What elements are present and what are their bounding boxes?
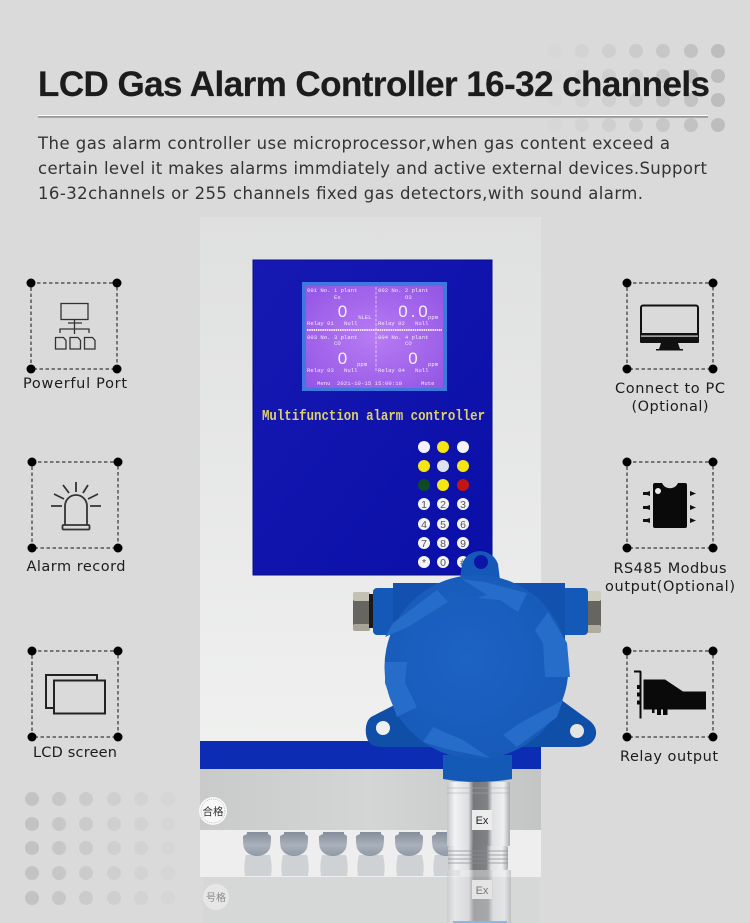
side pipes — [373, 588, 397, 635]
controller name: Multifunction alarm controller — [262, 409, 485, 425]
keypad: 8 — [440, 538, 446, 550]
lcd display: Null — [344, 320, 358, 327]
icon: desktop monitor — [640, 306, 699, 350]
feature: Alarm record: Alarm record — [26, 559, 126, 575]
cable glands — [243, 832, 461, 876]
description text: The gas alarm controller use microprocessor,when gas content exceed a — [37, 134, 670, 153]
nut: left — [353, 592, 374, 631]
mounting ears — [366, 699, 596, 747]
keypad: 9 — [460, 538, 466, 550]
icon: stacked screens — [46, 675, 105, 714]
sensor probe — [447, 782, 510, 870]
lcd display: 0 — [408, 349, 418, 368]
lcd display: Relay 04 — [378, 367, 405, 374]
dot pattern: top right — [548, 44, 725, 132]
lcd display: Ex — [334, 294, 341, 301]
lcd display: Mute — [421, 380, 434, 387]
gas detector — [353, 551, 601, 923]
feature: Connect to PC: (Optional) — [632, 399, 708, 415]
lower housing — [200, 769, 541, 830]
lcd display: %LEL — [358, 314, 371, 321]
nut: right — [587, 591, 601, 633]
feature: Connect to PC — [615, 278, 725, 415]
stamp: reflection: 号格 — [206, 891, 226, 904]
feature: Relay output — [620, 646, 718, 765]
lcd display: CO — [334, 340, 341, 347]
feature: RS485 Modbus: RS485 Modbus — [614, 561, 726, 577]
sensor probe: Ex — [476, 815, 489, 827]
round cover — [384, 575, 568, 759]
lcd display: 004 No. 4 plant — [378, 334, 428, 341]
icon: expansion card — [634, 670, 706, 718]
lcd display: 0 — [338, 349, 347, 368]
feature: Powerful Port — [23, 278, 127, 392]
lcd display: 0 — [398, 302, 408, 321]
feature: RS485 Modbus — [605, 458, 735, 595]
feature: Alarm record — [26, 458, 126, 575]
icon: chip — [643, 483, 696, 528]
keypad: 6 — [460, 519, 466, 531]
keypad: 2 — [440, 499, 446, 511]
body box — [393, 583, 565, 643]
feature: Connect to PC: Connect to PC — [615, 381, 725, 397]
lcd display: ppm — [428, 361, 439, 368]
cable gland strip — [200, 830, 541, 877]
feature: Powerful Port: Powerful Port — [23, 376, 127, 392]
icon: alarm beacon — [51, 482, 101, 530]
keypad: 1 — [421, 499, 427, 511]
title: LCD Gas Alarm Controller 16-32 channels — [38, 65, 710, 104]
keypad: * — [422, 557, 426, 569]
feature: LCD screen: LCD screen — [33, 745, 117, 761]
blue front screen — [253, 260, 492, 575]
keypad: # — [460, 557, 466, 569]
keypad — [418, 441, 469, 569]
reflected probe — [447, 870, 511, 923]
stamp: qualified — [199, 797, 227, 825]
lcd display: CO — [405, 340, 412, 347]
description text: 16-32channels or 255 channels fixed gas detectors,with sound alarm. — [38, 184, 643, 203]
keypad: 0 — [440, 557, 446, 569]
stamp: reflection — [203, 884, 229, 910]
lcd display: O3 — [405, 294, 412, 301]
lcd display: ppm — [428, 314, 439, 321]
lcd display: 003 No. 3 plant — [307, 334, 357, 341]
dot pattern: bottom left — [25, 792, 175, 905]
feature: RS485 Modbus: output(Optional) — [605, 579, 735, 595]
lcd display: 0 — [418, 302, 428, 321]
keypad: 5 — [440, 519, 446, 531]
stamp: qualified: 合格 — [202, 805, 224, 818]
keypad: 3 — [460, 499, 466, 511]
reflected probe: Ex — [476, 885, 489, 897]
lcd display — [302, 282, 447, 391]
mounting lug — [460, 551, 500, 580]
lcd display: Null — [415, 367, 429, 374]
blue band — [200, 741, 541, 769]
lcd display: Null — [344, 367, 358, 374]
description text — [37, 134, 708, 203]
lcd display: 2021-10-15 15:00:10 — [337, 380, 403, 387]
keypad: 4 — [421, 519, 427, 531]
lcd display: 001 No. 1 plant — [307, 287, 357, 294]
description text: certain level it makes alarms immdiately and active external devices.Support — [38, 159, 708, 178]
reflection housing — [203, 877, 539, 923]
lcd display: Relay 01 — [307, 320, 334, 327]
lcd display: Relay 02 — [378, 320, 405, 327]
lcd display: 0 — [338, 302, 347, 321]
title underline — [38, 115, 708, 117]
panel: alarm controller — [199, 217, 541, 923]
feature: LCD screen — [28, 646, 122, 761]
lcd display: 002 No. 2 plant — [378, 287, 428, 294]
detector neck — [443, 755, 512, 782]
lcd display: Relay 03 — [307, 367, 334, 374]
feature: Relay output: Relay output — [620, 749, 718, 765]
lcd display: Null — [415, 320, 429, 327]
controller housing — [200, 217, 541, 741]
lcd display: Menu — [317, 380, 330, 387]
icon: network monitor — [56, 304, 95, 349]
keypad: 7 — [421, 538, 427, 550]
cover ribs — [385, 579, 570, 758]
lcd display: . — [411, 302, 415, 321]
lcd display: ppm — [357, 361, 368, 368]
